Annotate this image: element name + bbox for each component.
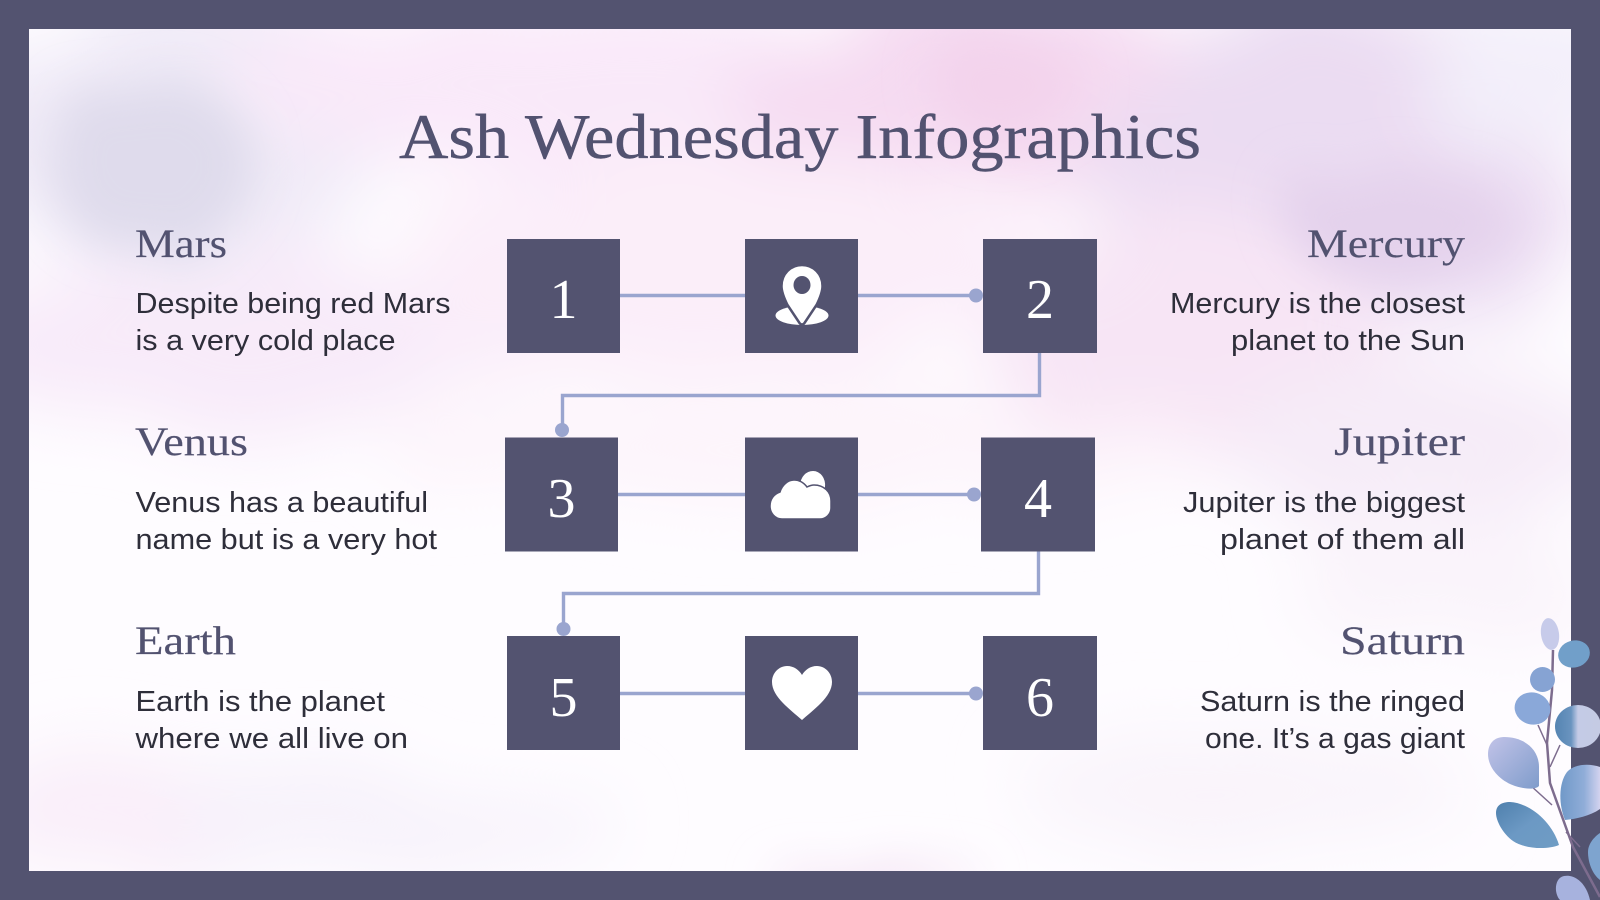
leaf 3: [1530, 667, 1555, 692]
step 3 box: 3: [548, 468, 576, 530]
leaf 5: [1555, 705, 1600, 748]
cloud icon box: [745, 438, 858, 552]
text: Earth: where we all live on: [134, 723, 408, 755]
leaf 2: [1555, 637, 1593, 671]
text: Venus: [135, 419, 437, 556]
step 2 box: [983, 239, 1097, 353]
leaf 4: [1511, 688, 1554, 729]
leaf 1: [1539, 617, 1561, 651]
text: Jupiter: [1183, 419, 1465, 556]
step 4 box: [981, 438, 1095, 552]
text: Mercury: Mercury: [1307, 221, 1465, 266]
text: Saturn: Saturn is the ringed: [1200, 686, 1465, 718]
text: Saturn: one. It’s a gas giant: [1205, 723, 1465, 755]
text: Mars: is a very cold place: [136, 325, 396, 357]
step 5 box: 5: [550, 667, 578, 729]
pin icon box: [745, 239, 858, 353]
text: Mars: Despite being red Mars: [136, 288, 451, 320]
leaf 6: [1488, 737, 1539, 789]
text: Mars: Mars: [135, 221, 227, 266]
text: Venus: Venus has a beautiful: [136, 487, 428, 519]
text: Mercury: planet to the Sun: [1231, 325, 1465, 357]
step 1 box: [507, 239, 620, 353]
text: Jupiter: planet of them all: [1220, 524, 1465, 556]
text: Jupiter: Jupiter: [1334, 419, 1465, 464]
step 3 box: [505, 438, 618, 552]
step 6 box: [983, 636, 1097, 750]
step 1 box: 1: [550, 269, 578, 331]
text: Earth: Earth: [135, 618, 236, 663]
text: Saturn: Saturn: [1340, 618, 1465, 663]
leaf 8: [1560, 765, 1600, 820]
title: Ash Wednesday Infographics: [399, 102, 1201, 172]
step 2 box: 2: [1026, 269, 1054, 331]
text: Saturn: [1200, 618, 1465, 755]
leaf 10: [1556, 876, 1590, 900]
step 4 box: 4: [1024, 468, 1052, 530]
step 5 box: [507, 636, 620, 750]
text: Earth: [134, 618, 408, 755]
text: Venus: name but is a very hot: [136, 524, 437, 556]
leaf 9: [1588, 833, 1600, 880]
heart icon box: [745, 636, 858, 750]
connector lines: [555, 288, 1040, 700]
text: Mercury: [1170, 221, 1465, 357]
eucalyptus branch: [1488, 617, 1600, 900]
step 6 box: 6: [1026, 667, 1054, 729]
text: Venus: Venus: [135, 419, 248, 464]
text: Jupiter: Jupiter is the biggest: [1183, 487, 1465, 519]
text: Earth: Earth is the planet: [136, 686, 385, 718]
text: Mercury: Mercury is the closest: [1170, 288, 1465, 320]
text: Mars: [135, 221, 451, 357]
leaf 7: [1496, 802, 1559, 848]
